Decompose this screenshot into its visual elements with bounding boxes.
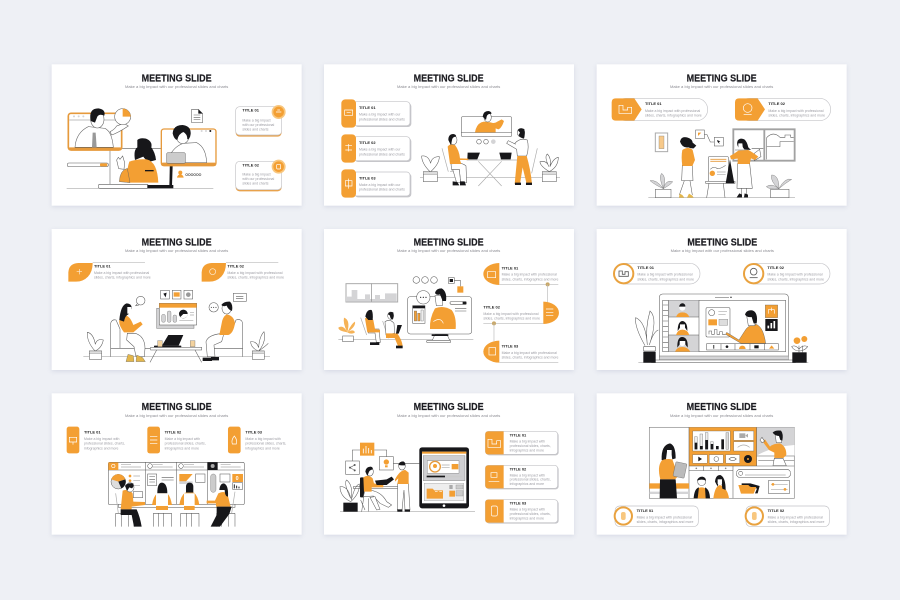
subtitle: Make a big Impact with our professional slides and charts (397, 248, 500, 253)
callout: title 01: Make a big impact with professional (637, 515, 692, 519)
callout: title 02: professional slides, charts, (510, 478, 551, 482)
illustration: dashboard collage (649, 427, 794, 498)
callout: title 02: TITLE 02 (767, 265, 785, 270)
illustration: team at wall of screens (108, 462, 244, 527)
callout: title 01: TITLE 01 (359, 105, 376, 110)
panel: slide 4 (52, 229, 302, 370)
callout: title 03 (228, 427, 286, 453)
callout: title 01 (68, 262, 151, 282)
callout: title 01: slides, charts, infographics and more (637, 277, 694, 281)
callout: title 02: TITLE 02 (227, 263, 245, 268)
illustration: tablet collaboration (340, 443, 475, 512)
callout: title 02 (236, 160, 286, 191)
callout: title 01: Make a big impact with (510, 440, 545, 444)
callout: title 01 (614, 263, 700, 284)
callout: title 01 (67, 427, 125, 453)
subtitle: Make a big Impact with our professional slides and charts (125, 248, 228, 253)
callout: title 02: professional slides and charts (359, 152, 405, 156)
heading: MEETING SLIDE (687, 73, 757, 84)
callout: title 02 (735, 98, 831, 121)
heading: MEETING SLIDE (142, 73, 212, 84)
callout: title 01: TITLE 01 (637, 508, 654, 513)
callout: title 01: TITLE 01 (84, 430, 101, 435)
heading: MEETING SLIDE (414, 402, 484, 413)
heading: MEETING SLIDE (142, 237, 212, 248)
callout: title 03: TITLE 03 (502, 343, 519, 348)
callout: title 01: slides, charts, infographics and more (637, 520, 693, 524)
callout: title 02: TITLE 02 (359, 140, 376, 145)
callout: title 01: Make a big impact with our (359, 113, 401, 117)
callout: title 03: Make a big impact with our (359, 183, 401, 187)
callout: title 02: slides and charts (242, 182, 269, 186)
callout: title 01 (485, 431, 559, 455)
callout: title 01: slides, charts, infographics and more (645, 114, 702, 118)
callout: title 02 (147, 427, 206, 453)
callout: title 02: infographics and more (510, 482, 544, 486)
subtitle: Make a big Impact with our professional slides and charts (397, 84, 500, 89)
callout: title 03: slides, charts, infographics and more (502, 356, 558, 360)
heading: MEETING SLIDE (687, 402, 757, 413)
callout: title 03: professional slides, charts, (245, 442, 286, 446)
subtitle: Make a big Impact with our professional slides and charts (125, 84, 228, 89)
callout: title 01 (615, 506, 698, 527)
panel: slide 1 (52, 64, 302, 206)
callout: title 02: TITLE 02 (768, 508, 785, 513)
callout: title 01 (612, 98, 708, 121)
callout: title 03: Make a big impact with (245, 437, 281, 441)
callout: title 03 (341, 169, 411, 198)
callout: title 02: TITLE 02 (242, 162, 260, 167)
callout: title 02: TITLE 02 (165, 430, 182, 435)
callout: title 01: TITLE 01 (510, 433, 527, 438)
callout: title 02: Make a big impact with (165, 437, 200, 441)
callout: title 03: Make a big impact with (510, 508, 545, 512)
callout: title 02 (746, 506, 829, 527)
callout: title 01: Make a big impact with professional (645, 109, 700, 113)
callout: title 02: slides, charts, infographics and more (227, 276, 284, 280)
panel: slide 7 (52, 393, 302, 535)
callout: title 02: professional slides, charts, (165, 442, 206, 446)
heading: MEETING SLIDE (414, 73, 484, 84)
callout: title 01: Make a big impact with professional (637, 273, 693, 277)
callout: title 01: infographics and more (84, 446, 119, 450)
callout: title 02: Make a big impact with professional (483, 312, 539, 316)
callout: title 01: with our professional (242, 123, 274, 127)
callout: title 02 (485, 465, 559, 489)
callout: title 02: TITLE 02 (768, 101, 786, 106)
callout: title 01: professional slides and charts (359, 117, 405, 121)
callout: title 03: Make a big impact with professional (502, 351, 557, 355)
callout: title 01: Make a big impact with professional (94, 271, 149, 275)
callout: title 02: Make a big impact with (510, 473, 545, 477)
illustration: lounge meeting (83, 290, 270, 362)
callout: title 02: Make a big impact with our (359, 148, 401, 152)
callout: title 01: slides, charts, infographics and more (502, 277, 558, 281)
panel: slide 2 (324, 64, 574, 206)
callout: title 03: professional slides, charts, (510, 512, 551, 516)
panel: slide 9 (597, 393, 847, 535)
callout: title 02: with our professional (242, 177, 274, 181)
illustration: remote presenter (338, 277, 473, 348)
callout: title 02: slides, charts, infographics and more (767, 277, 824, 281)
callout: title 02: TITLE 02 (483, 304, 501, 309)
subtitle: Make a big Impact with our professional slides and charts (671, 248, 774, 253)
callout: title 01: Make a big impact (242, 118, 271, 122)
heading: MEETING SLIDE (142, 402, 212, 413)
callout: title 03: professional slides and charts (359, 188, 405, 192)
callout: title 02: slides, charts, infographics and more (483, 317, 540, 321)
callout: title 01: TITLE 01 (502, 265, 519, 270)
callout: title 01: slides and charts (242, 128, 269, 132)
callout: title 03: TITLE 03 (510, 501, 527, 506)
callout: title 01 (483, 263, 558, 302)
panel: slide 6 (597, 229, 847, 370)
callout: title 01: Make a big impact with (84, 437, 119, 441)
illustration: video call (67, 108, 216, 188)
callout: title 02: Make a big impact (242, 172, 271, 176)
panel: slide 3 (597, 64, 847, 206)
heading: MEETING SLIDE (687, 237, 757, 248)
callout: title 03: infographics and more (510, 516, 544, 520)
callout: title 01: infographics and more (510, 448, 544, 452)
callout: title 02: slides, charts, infographics and more (768, 114, 825, 118)
heading: MEETING SLIDE (414, 237, 484, 248)
illustration: meeting table (420, 111, 560, 186)
callout: title 03 (485, 500, 559, 524)
callout: title 02: Make a big impact with professional (227, 271, 283, 275)
illustration: presentation (648, 129, 795, 198)
callout: title 01 (236, 105, 286, 137)
callout: title 02 (483, 302, 559, 341)
subtitle: Make a big Impact with our professional slides and charts (397, 413, 500, 418)
panel: slide 5 (324, 229, 574, 370)
illustration: laptop video call (636, 294, 808, 363)
illustration: team at wall of screens: 0 (236, 476, 239, 482)
callout: title 03: infographics and more (245, 446, 280, 450)
panel: slide 8 (324, 393, 574, 535)
callout: title 01: TITLE 01 (637, 265, 655, 270)
callout: title 01 (341, 99, 411, 128)
subtitle: Make a big Impact with our professional slides and charts (125, 413, 228, 418)
callout: title 03: TITLE 03 (245, 430, 263, 435)
callout: title 02: Make a big impact with professional (768, 109, 824, 113)
callout: title 02: Make a big impact with professional (767, 273, 823, 277)
callout: title 01: TITLE 01 (242, 108, 260, 113)
callout: title 01: professional slides, charts, (510, 444, 551, 448)
callout: title 03 (483, 341, 558, 363)
callout: title 02: infographics and more (165, 446, 199, 450)
callout: title 01: slides, charts, infographics and more (94, 276, 151, 280)
subtitle: Make a big Impact with our professional slides and charts (670, 84, 773, 89)
callout: title 02 (744, 263, 830, 284)
callout: title 01: TITLE 01 (94, 263, 111, 268)
callout: title 01: Make a big impact with professional (502, 273, 557, 277)
callout: title 03: TITLE 03 (359, 175, 376, 180)
callout: title 02: TITLE 02 (510, 466, 527, 471)
callout: title 02 (341, 134, 411, 163)
callout: title 02: Make a big impact with professional (768, 515, 823, 519)
callout: title 02: slides, charts, infographics and more (768, 520, 824, 524)
callout: title 01: professional slides, charts, (84, 442, 125, 446)
callout: title 01: TITLE 01 (645, 101, 662, 106)
callout: title 02 (202, 262, 284, 282)
subtitle: Make a big Impact with our professional slides and charts (670, 413, 773, 418)
